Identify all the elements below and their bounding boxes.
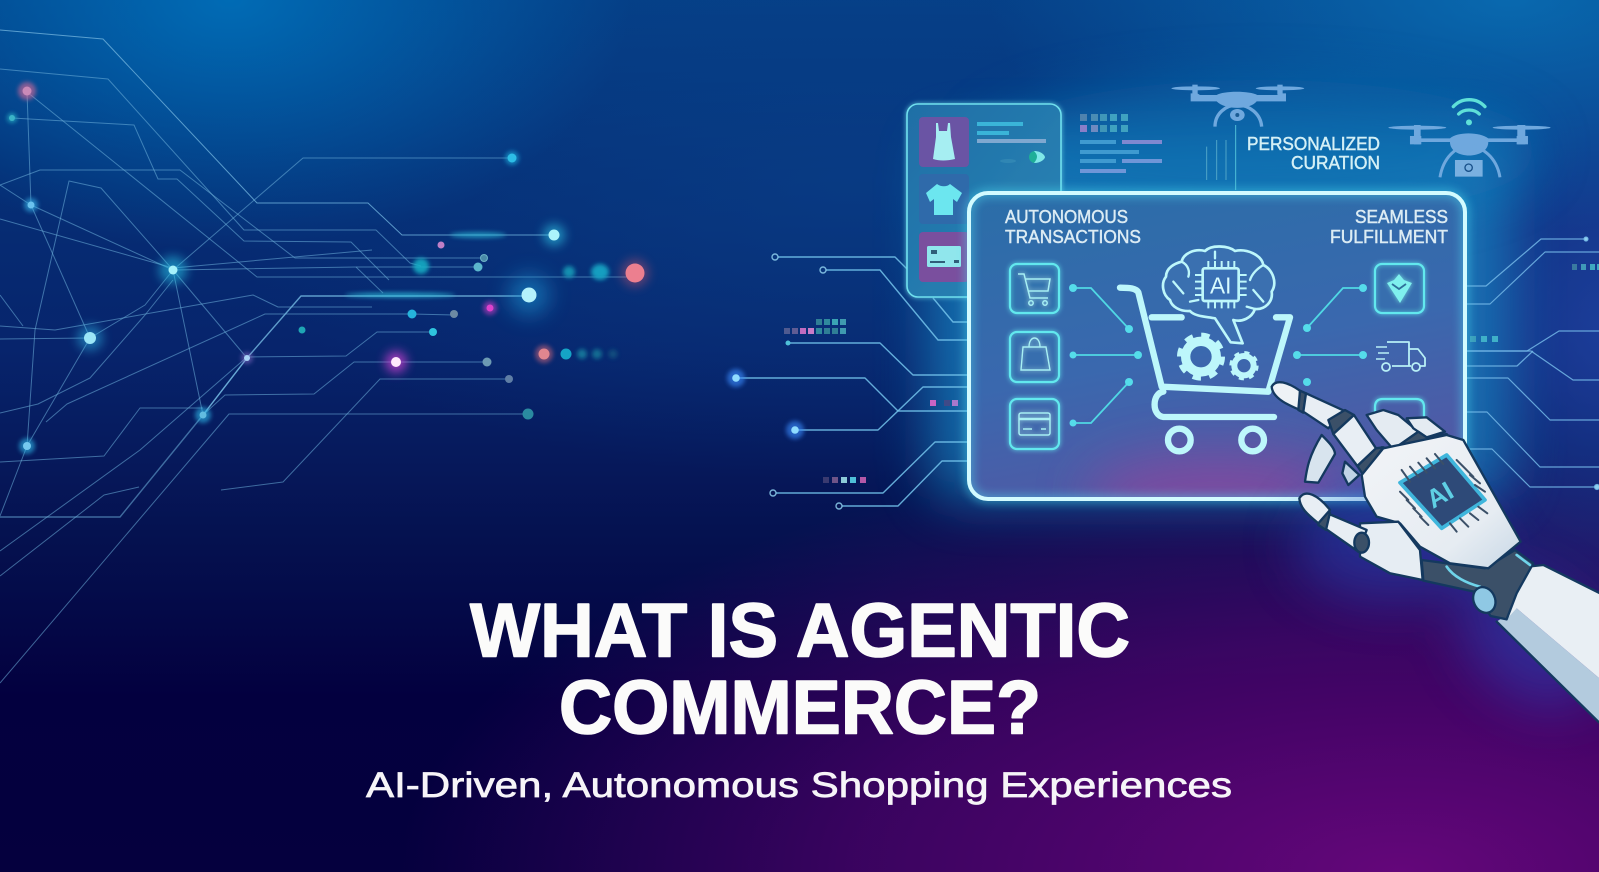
icon: delivery drone two with wifi — [1388, 100, 1551, 177]
connectors: cart to right icons — [1293, 284, 1367, 386]
pixel squares left of dashboard — [784, 319, 958, 483]
toggle icon — [1000, 151, 1045, 163]
title: WHAT IS AGENTIC — [470, 588, 1130, 674]
AI chip on hand: AI — [1421, 475, 1459, 514]
forearm — [1497, 565, 1599, 727]
AI chip: AI — [1210, 272, 1231, 298]
product tile: t-shirt — [919, 174, 969, 224]
connectors: left icons to cart — [1069, 284, 1142, 426]
circuits right of dashboard — [1453, 237, 1599, 490]
label: autonomous transactions — [1005, 207, 1141, 247]
icon tile: gem shield — [1375, 264, 1424, 313]
wrist joint — [1422, 550, 1533, 619]
left circuit network — [0, 30, 635, 683]
AI chip — [1195, 261, 1247, 308]
label: seamless fulfillment: FULFILLMENT — [1330, 227, 1448, 247]
label: personalized curation — [1247, 134, 1380, 173]
index finger — [1272, 382, 1383, 475]
thumb — [1299, 494, 1423, 580]
icon tile: partially hidden third tile — [1375, 399, 1424, 420]
brain outline — [1163, 246, 1274, 343]
back fingers — [1367, 410, 1450, 457]
title — [470, 588, 1130, 750]
panel: main AI shopping dashboard — [969, 193, 1465, 535]
icon: delivery truck — [1376, 342, 1425, 371]
panel: product catalog sidebar — [907, 104, 1061, 297]
icon tile: credit card — [1010, 399, 1059, 449]
glow around robotic hand — [1295, 490, 1599, 734]
brain inner curves — [1173, 252, 1263, 309]
label: seamless fulfillment: SEAMLESS — [1355, 207, 1448, 227]
label: autonomous transactions: TRANSACTIONS — [1005, 227, 1141, 247]
label: seamless fulfillment — [1330, 207, 1448, 247]
right side glow behind dashboard — [930, 80, 1540, 500]
label: personalized curation: CURATION — [1291, 153, 1380, 173]
product tile: dress — [919, 117, 969, 167]
product text lines — [977, 122, 1046, 143]
subtitle: AI-Driven, Autonomous Shopping Experiences — [366, 766, 1232, 805]
icon: AI shopping cart with brain and gears — [1120, 246, 1290, 451]
label: personalized curation: PERSONALIZED — [1247, 134, 1380, 154]
gears — [1180, 335, 1257, 379]
product tile: payment card — [919, 232, 969, 282]
icon tile: shopping bag — [1010, 332, 1059, 382]
palm — [1362, 435, 1521, 568]
data readout blocks — [1080, 114, 1162, 173]
left circuit glowing nodes — [7, 82, 649, 454]
icon: delivery drone one — [1171, 85, 1304, 190]
label: autonomous transactions: AUTONOMOUS — [1005, 207, 1128, 227]
curled fingers — [1305, 435, 1359, 485]
circuits left of dashboard — [727, 254, 972, 509]
title: COMMERCE? — [559, 666, 1041, 750]
illustration: robotic arm and pointing hand — [1272, 382, 1599, 727]
cart frame — [1120, 288, 1290, 451]
icon tile: shopping cart — [1010, 264, 1059, 313]
AI chip on hand — [1400, 454, 1487, 532]
